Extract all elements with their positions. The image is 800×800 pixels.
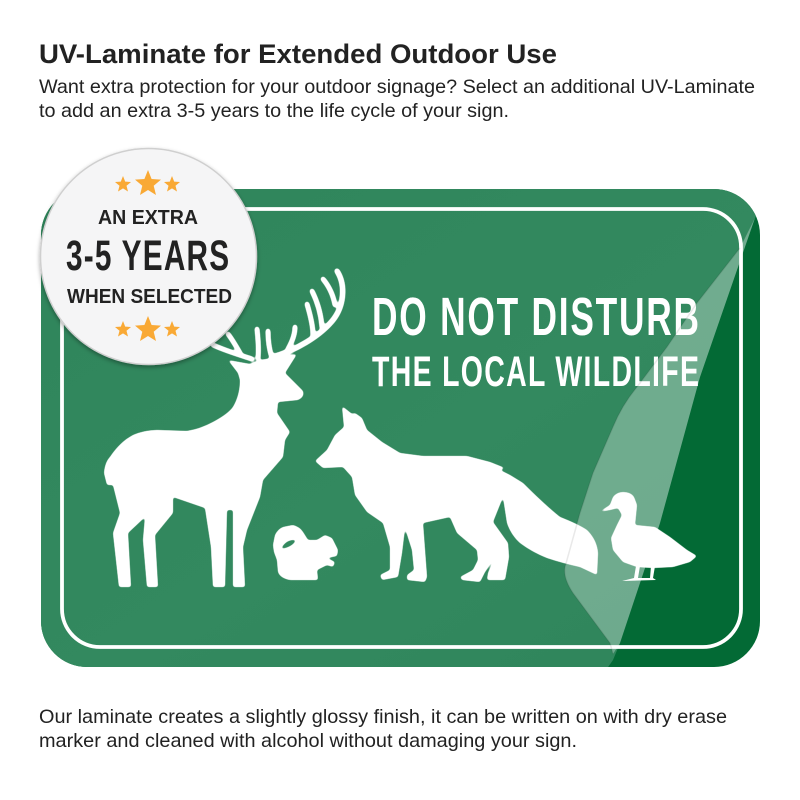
badge text: WHEN SELECTED (67, 286, 232, 308)
sign base (41, 189, 760, 667)
footer text: marker and cleaned with alcohol without damaging your sign. (39, 730, 577, 752)
badge text: AN EXTRA (98, 207, 198, 229)
intro text (39, 76, 755, 122)
icon: squirrel (273, 525, 338, 580)
intro text: to add an extra 3-5 years to the life cycle of your sign. (39, 100, 509, 122)
panel: wildlife sign (30, 180, 775, 670)
intro text: Want extra protection for your outdoor signage? Select an additional UV-Laminate (39, 76, 755, 98)
icon: duck (599, 492, 697, 581)
footer text: Our laminate creates a slightly glossy finish, it can be written on with dry erase (39, 706, 727, 728)
laminate peel highlight (565, 218, 755, 654)
badge circle (40, 148, 256, 364)
badge text (66, 207, 232, 308)
sign headline: THE LOCAL WILDLIFE (372, 347, 699, 395)
laminate layer (30, 180, 775, 670)
icon: deer (104, 271, 343, 587)
icon: fox (315, 406, 598, 582)
sign headline: DO NOT DISTURB (372, 287, 699, 347)
footer text (39, 706, 727, 752)
sign headline (372, 287, 699, 395)
icon: bottom stars (115, 316, 180, 341)
badge text: 3-5 YEARS (66, 232, 229, 279)
title: UV-Laminate for Extended Outdoor Use (39, 39, 557, 69)
icon: top stars (115, 170, 180, 195)
sign inner border (62, 209, 741, 647)
callout: extra years badge (40, 148, 256, 364)
